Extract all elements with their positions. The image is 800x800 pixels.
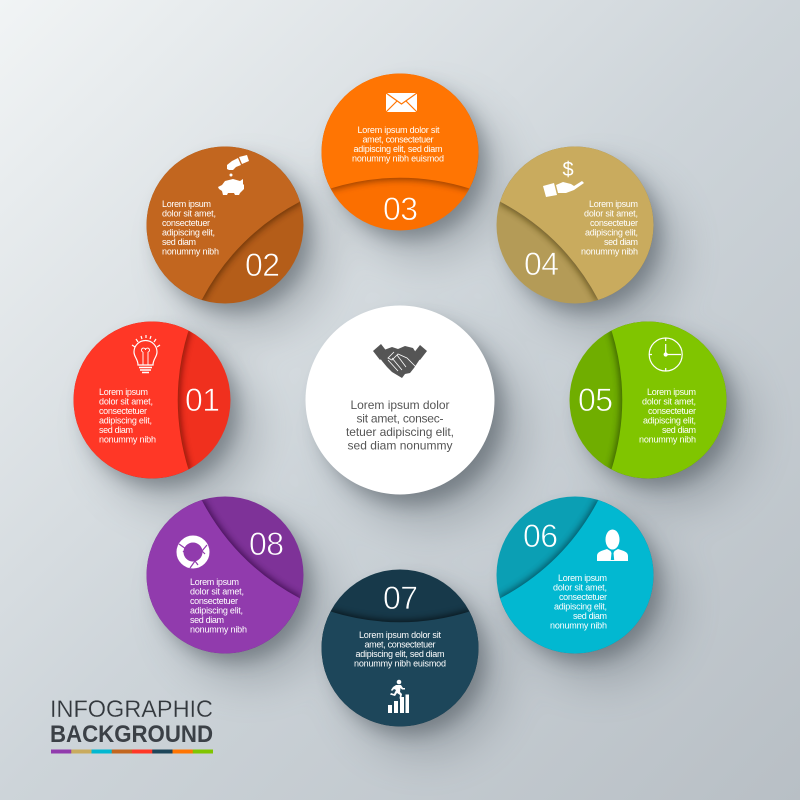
text 08: [190, 577, 247, 634]
circle 03: [322, 74, 478, 230]
text 05: sed diam: [662, 425, 696, 435]
text 03: Lorem ipsum dolor sit: [358, 125, 440, 135]
circle 04: [496, 146, 654, 304]
circle 07: [322, 570, 478, 726]
circle 08: [146, 496, 304, 654]
text 02: Lorem ipsum: [162, 199, 211, 209]
number 06: 06: [523, 518, 558, 554]
text 03: nonummy nibh euismod: [352, 154, 444, 164]
icon: handshake: [373, 344, 427, 378]
text 07: [354, 630, 446, 668]
title: [50, 696, 213, 754]
number 05: 05: [578, 382, 613, 418]
text 04: [581, 199, 638, 256]
circle 06: [496, 496, 654, 654]
text 01: consectetuer: [99, 406, 147, 416]
text 01: [99, 387, 156, 444]
text 01: Lorem ipsum: [99, 387, 148, 397]
icon: hand with dollar: $: [562, 159, 574, 181]
text 04: sed diam: [604, 237, 638, 247]
center text: tetuer adipiscing elit,: [346, 425, 454, 439]
icon: piggy bank and coin: [218, 155, 249, 195]
title: INFOGRAPHIC: [50, 696, 213, 723]
text 08: dolor sit amet,: [190, 586, 244, 596]
text 06: sed diam: [573, 611, 607, 621]
text 06: nonummy nibh: [550, 620, 607, 630]
text 07: amet, consectetuer: [364, 640, 436, 650]
text 08: sed diam: [190, 615, 224, 625]
text 04: adipiscing elit,: [585, 228, 638, 238]
center circle: [306, 306, 494, 494]
text 04: Lorem ipsum: [589, 199, 638, 209]
text 08: Lorem ipsum: [190, 577, 239, 587]
text 06: Lorem ipsum: [558, 573, 607, 583]
number 03: 03: [383, 191, 418, 227]
center text: Lorem ipsum dolor: [350, 398, 450, 412]
text 03: [352, 125, 444, 164]
icon: hand with dollar: [543, 159, 584, 197]
icon: runner on bars: [388, 680, 409, 713]
icon: businessman: [597, 530, 628, 561]
text 05: adipiscing elit,: [643, 416, 696, 426]
text 08: adipiscing elit,: [190, 606, 243, 616]
text 07: adipiscing elit, sed diam: [356, 649, 444, 659]
text 05: [639, 387, 696, 444]
circle 02: [146, 146, 304, 304]
icon: clock: [649, 338, 682, 371]
text 05: consectetuer: [648, 406, 696, 416]
text 03: amet, consectetuer: [362, 134, 434, 144]
text 02: adipiscing elit,: [162, 228, 215, 238]
text 08: nonummy nibh: [190, 624, 247, 634]
text 02: sed diam: [162, 237, 196, 247]
text 07: Lorem ipsum dolor sit: [359, 630, 441, 640]
text 06: [550, 573, 607, 630]
shadows: [84, 85, 751, 754]
text 06: consectetuer: [559, 592, 607, 602]
text 07: nonummy nibh euismod: [354, 658, 446, 668]
text 04: nonummy nibh: [581, 246, 638, 256]
text 04: consectetuer: [590, 218, 638, 228]
icon: cycle arrows: [179, 539, 207, 568]
number 01: 01: [185, 382, 220, 418]
circle 01: [74, 322, 230, 478]
text 04: dolor sit amet,: [584, 208, 638, 218]
text 08: consectetuer: [190, 596, 238, 606]
title: BACKGROUND: [50, 721, 213, 748]
text 01: adipiscing elit,: [99, 416, 152, 426]
number 02: 02: [245, 247, 280, 283]
number 04: 04: [524, 246, 559, 282]
text 01: dolor sit amet,: [99, 396, 153, 406]
circle 05: [570, 322, 726, 478]
color bar: [51, 750, 213, 754]
text 02: [162, 199, 219, 256]
text 01: sed diam: [99, 425, 133, 435]
number 08: 08: [249, 526, 284, 562]
text 06: adipiscing elit,: [554, 602, 607, 612]
text 03: adipiscing elit, sed diam: [354, 144, 442, 154]
icon: envelope: [386, 93, 417, 112]
text 05: dolor sit amet,: [642, 396, 696, 406]
text 02: dolor sit amet,: [162, 208, 216, 218]
number 07: 07: [383, 580, 418, 616]
text 05: nonummy nibh: [639, 434, 696, 444]
text 02: consectetuer: [162, 218, 210, 228]
center text: sed diam nonummy: [348, 438, 452, 452]
text 06: dolor sit amet,: [553, 582, 607, 592]
center text: [346, 398, 454, 452]
center text: sit amet, consec-: [356, 412, 444, 426]
text 01: nonummy nibh: [99, 434, 156, 444]
text 02: nonummy nibh: [162, 246, 219, 256]
icon: light bulb: [132, 335, 160, 372]
text 05: Lorem ipsum: [647, 387, 696, 397]
